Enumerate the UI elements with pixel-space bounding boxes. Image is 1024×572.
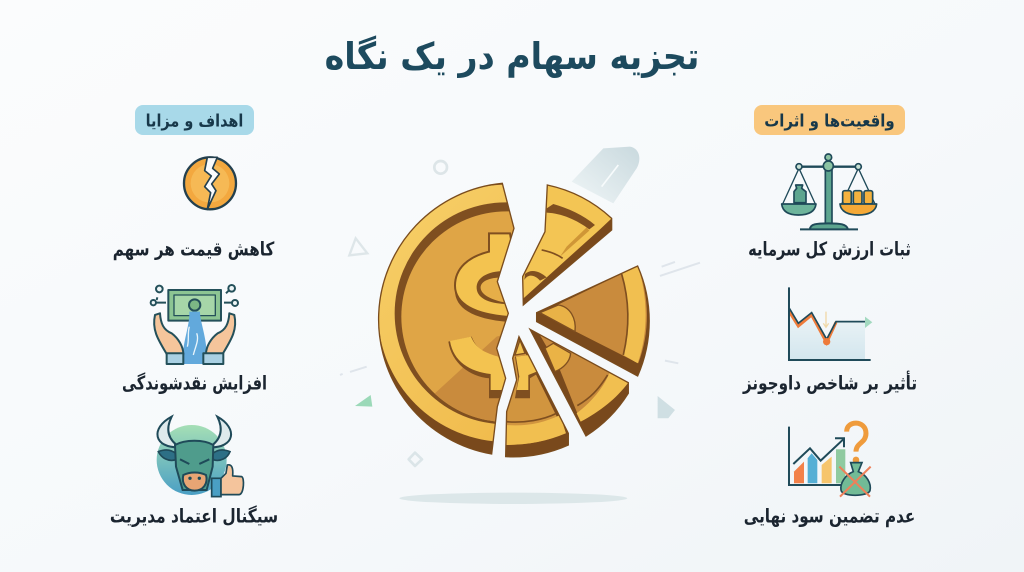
- label: liquidity: افزایش نقدشوندگی: [122, 372, 267, 395]
- panel: realities: [742, 105, 917, 528]
- coin piece: large left: [378, 182, 515, 455]
- heading pill: benefits: [135, 105, 254, 135]
- icon: balance scale: [782, 154, 877, 229]
- label: dow index: تأثیر بر شاخص داوجونز: [742, 371, 917, 395]
- label: signal: سیگنال اعتماد مدیریت: [110, 505, 278, 528]
- icon: chart with question and money bag: [789, 423, 871, 497]
- panel: benefits: [110, 105, 278, 528]
- heading pill: benefits: اهداف و مزایا: [146, 110, 243, 131]
- icon: cracked coin: [184, 157, 236, 209]
- coin piece: right wedge: [536, 265, 650, 377]
- coin piece: top wedge: [522, 184, 612, 306]
- coin piece: bottom wedge: [503, 335, 573, 458]
- title: تجزیه سهام در یک نگاه: [325, 34, 699, 78]
- label: price: کاهش قیمت هر سهم: [113, 239, 274, 261]
- label: no final profit: عدم تضمین سود نهایی: [744, 506, 915, 528]
- coin piece: lower right wedge: [527, 327, 633, 440]
- icon: cash and hands: [151, 285, 238, 364]
- illustration: broken dollar coin: [340, 147, 700, 504]
- label: capital value: ثبات ارزش کل سرمایه: [748, 238, 911, 261]
- decorative shapes: [340, 147, 700, 504]
- heading pill: realities: واقعیت‌ها و اثرات: [764, 111, 895, 131]
- icon: bull with thumbs up: [157, 417, 243, 497]
- icon: line chart dow jones: [789, 287, 872, 360]
- heading pill: realities: [754, 105, 905, 135]
